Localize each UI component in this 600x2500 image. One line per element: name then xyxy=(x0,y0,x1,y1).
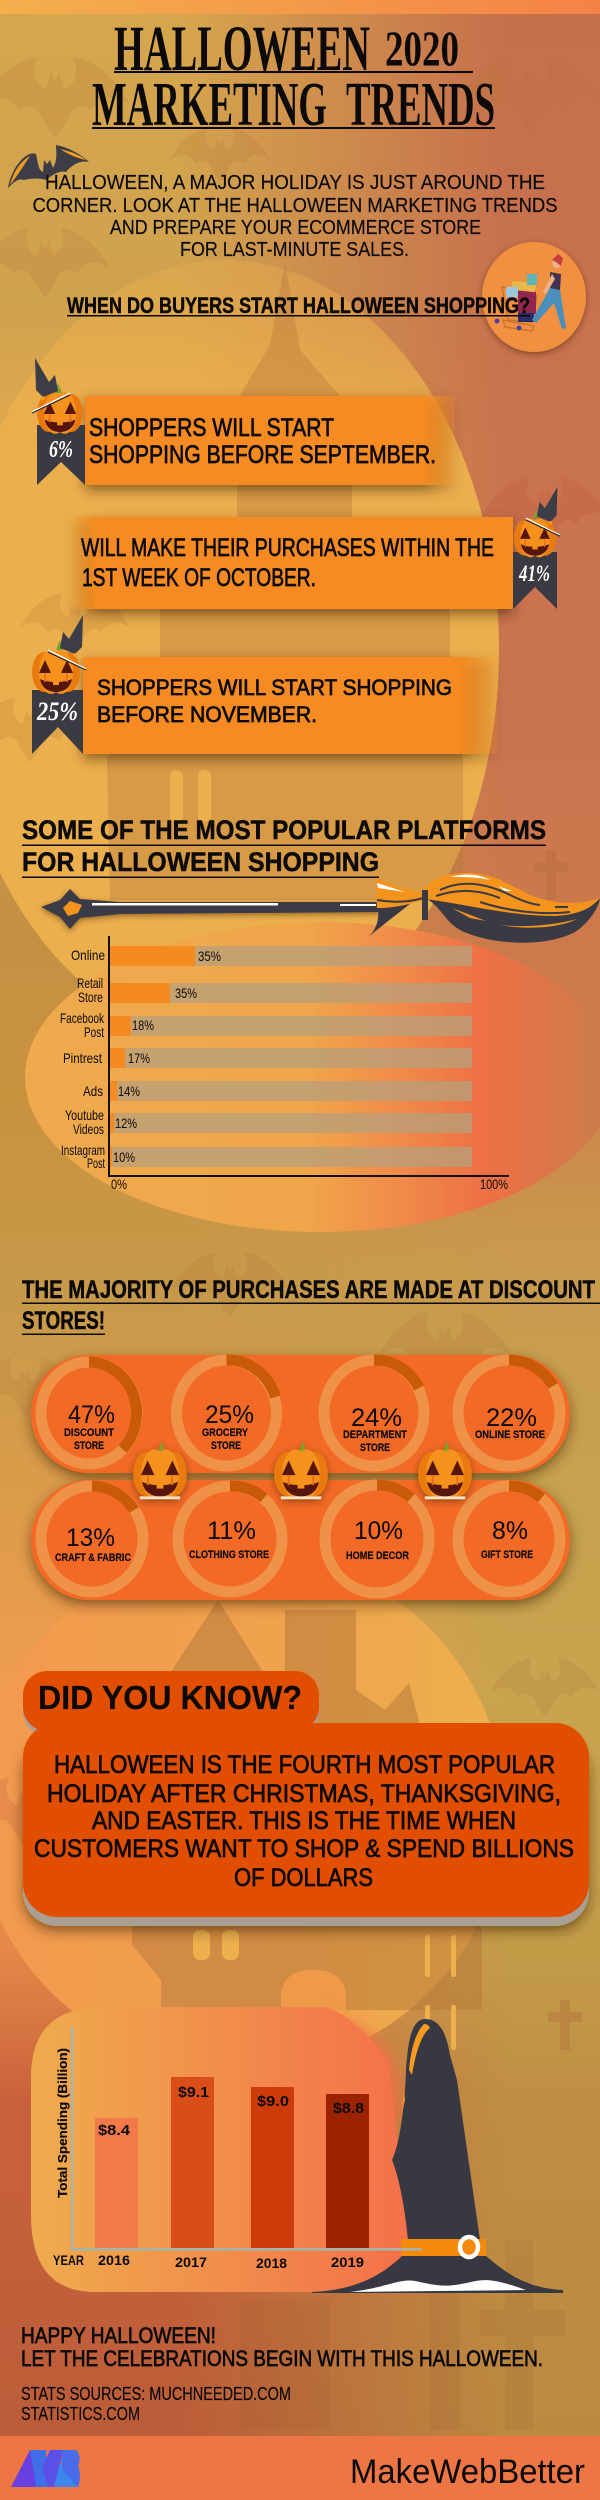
bar chart: total spending: Total Spending (Billion) xyxy=(56,2048,70,2198)
panel: 25% shoppers: SHOPPERS WILL START SHOPPING xyxy=(97,675,452,700)
footer bar: MakeWebBetter xyxy=(350,2453,585,2491)
intro text: FOR LAST-MINUTE SALES. xyxy=(180,239,409,261)
icon: logo xyxy=(11,2450,80,2487)
footer bar xyxy=(0,2436,600,2500)
stat: online store xyxy=(475,1404,545,1441)
closing message xyxy=(21,2323,543,2371)
panel: 25% shoppers: 25% xyxy=(36,697,78,726)
sources xyxy=(21,2384,291,2424)
icon: witch broom xyxy=(41,873,600,943)
panel: 6% shoppers: SHOPPING BEFORE SEPTEMBER. xyxy=(89,441,436,469)
icon: witch hat xyxy=(312,2019,563,2293)
bar chart: platforms: 0% xyxy=(111,1176,127,1192)
panel: spending chart background xyxy=(31,2007,410,2292)
callout: did you know: AND EASTER. THIS IS THE TIME WHEN xyxy=(92,1807,516,1835)
stat: craft and fabric: CRAFT & FABRIC xyxy=(55,1552,131,1564)
stat: discount store: STORE xyxy=(74,1440,104,1452)
closing message: HAPPY HALLOWEEN! xyxy=(21,2323,216,2348)
stat: grocery store: GROCERY xyxy=(202,1427,249,1439)
bar chart: platforms: Store xyxy=(78,989,103,1005)
icon: pumpkin with hat xyxy=(514,487,560,557)
panel: 41% purchases: WILL MAKE THEIR PURCHASES WITHIN THE xyxy=(81,534,494,562)
icon: pumpkin with hat xyxy=(32,358,83,434)
bar chart: total spending: 2019 xyxy=(331,2255,364,2270)
stat: clothing store: CLOTHING STORE xyxy=(189,1549,269,1561)
title xyxy=(92,13,495,139)
panel: 41% purchases xyxy=(70,487,560,609)
stat: discount store: 47% xyxy=(68,1401,115,1429)
stat: clothing store xyxy=(189,1517,269,1561)
bar chart: platforms: 17% xyxy=(128,1050,150,1066)
panel: 25% shoppers xyxy=(32,615,498,754)
bar chart: total spending: YEAR xyxy=(53,2253,84,2268)
stat: grocery store xyxy=(202,1401,254,1452)
stat: clothing store: 11% xyxy=(207,1517,256,1545)
bar chart: total spending: $9.1 xyxy=(178,2084,209,2101)
stat: online store: 22% xyxy=(486,1404,537,1432)
panel: 41% purchases: 1ST WEEK OF OCTOBER. xyxy=(82,564,316,592)
bar chart: total spending: 2016 xyxy=(98,2253,131,2268)
callout: did you know: OF DOLLARS xyxy=(234,1864,373,1892)
intro text: HALLOWEEN, A MAJOR HOLIDAY IS JUST AROUND THE xyxy=(45,172,545,194)
stat: grocery store: 25% xyxy=(205,1401,254,1429)
stat: department store xyxy=(343,1404,407,1454)
bar chart: platforms: Post xyxy=(84,1024,104,1040)
bar chart: total spending: $9.0 xyxy=(257,2093,289,2110)
bar chart: total spending: 2017 xyxy=(175,2255,207,2270)
bar chart: platforms: Online xyxy=(71,947,105,963)
sources: STATISTICS.COM xyxy=(21,2404,140,2424)
callout: did you know: HOLIDAY AFTER CHRISTMAS, THANKSGIVING, xyxy=(47,1780,561,1808)
bar chart: platforms: Videos xyxy=(73,1121,104,1137)
panel: store rings xyxy=(31,1355,570,1600)
callout: did you know xyxy=(23,1671,589,1926)
bar chart: platforms: Pintrest xyxy=(63,1050,102,1066)
panel: 25% shoppers: BEFORE NOVEMBER. xyxy=(97,702,317,727)
panel: 6% shoppers: 6% xyxy=(49,437,73,463)
stat: department store: STORE xyxy=(360,1442,390,1454)
stat: online store: ONLINE STORE xyxy=(475,1429,545,1441)
bar chart: platforms: 100% xyxy=(480,1176,508,1192)
icon: pumpkins xyxy=(133,1442,472,1499)
panel: 41% purchases: 41% xyxy=(518,561,550,586)
heading: popular platforms: SOME OF THE MOST POPULAR PLATFORMS xyxy=(22,815,546,845)
stat: gift store: 8% xyxy=(492,1517,528,1545)
icon: shopper with cart xyxy=(482,242,586,352)
title: 2020 xyxy=(385,20,459,76)
stat: home decor xyxy=(346,1517,409,1562)
panel: 6% shoppers xyxy=(32,358,455,485)
stat: discount store: DISCOUNT xyxy=(64,1427,114,1439)
stat: department store: DEPARTMENT xyxy=(343,1429,407,1441)
bar chart: platforms: Youtube xyxy=(65,1107,104,1123)
heading: discount stores xyxy=(22,1276,600,1335)
heading: discount stores: STORES! xyxy=(22,1307,105,1335)
intro text xyxy=(32,172,558,261)
heading: popular platforms: FOR HALLOWEEN SHOPPING xyxy=(22,847,379,877)
stat: gift store xyxy=(481,1517,533,1561)
bar chart: platforms: Ads xyxy=(83,1083,103,1099)
title: HALLOWEEN xyxy=(114,13,370,85)
panel: 6% shoppers: SHOPPERS WILL START xyxy=(89,414,334,442)
panel: platforms chart background xyxy=(25,922,600,1232)
bar chart: platforms: Instagram xyxy=(61,1142,105,1158)
bar chart: total spending: $8.4 xyxy=(98,2122,131,2139)
bar chart: platforms: 10% xyxy=(113,1149,135,1165)
icon: bat xyxy=(8,145,89,188)
bar chart: platforms: 35% xyxy=(198,948,221,964)
stat: home decor: 10% xyxy=(354,1517,403,1545)
callout: did you know: HALLOWEEN IS THE FOURTH MOST POPULAR xyxy=(54,1751,555,1779)
bar chart: platforms: Post xyxy=(87,1155,105,1171)
bar chart: platforms: Facebook xyxy=(60,1010,105,1026)
icon: pumpkin with hat xyxy=(32,615,86,694)
stat: gift store: GIFT STORE xyxy=(481,1549,533,1561)
stat: craft and fabric xyxy=(55,1524,131,1564)
bar chart: platforms: 18% xyxy=(132,1017,154,1033)
stat: discount store xyxy=(64,1401,115,1452)
bar chart: platforms xyxy=(60,936,509,1192)
intro text: CORNER. LOOK AT THE HALLOWEEN MARKETING TRENDS xyxy=(32,195,558,217)
bar chart: platforms: 12% xyxy=(115,1115,137,1131)
stat: grocery store: STORE xyxy=(211,1440,241,1452)
bar chart: total spending: $8.8 xyxy=(333,2100,364,2117)
title: TRENDS xyxy=(346,71,495,139)
stat: department store: 24% xyxy=(351,1404,402,1432)
bar chart: total spending: 2018 xyxy=(256,2256,287,2271)
callout: did you know: DID YOU KNOW? xyxy=(38,1679,302,1716)
stat: craft and fabric: 13% xyxy=(66,1524,115,1552)
heading: popular platforms xyxy=(22,815,546,878)
bar chart: platforms: 35% xyxy=(175,985,197,1001)
bar chart: platforms: Retail xyxy=(77,975,103,991)
sources: STATS SOURCES: MUCHNEEDED.COM xyxy=(21,2384,291,2404)
bar chart: platforms: 14% xyxy=(118,1083,140,1099)
bar chart: total spending xyxy=(53,2027,422,2271)
intro text: AND PREPARE YOUR ECOMMERCE STORE xyxy=(110,217,481,239)
stat: home decor: HOME DECOR xyxy=(346,1550,409,1562)
title: MARKETING xyxy=(92,71,327,139)
